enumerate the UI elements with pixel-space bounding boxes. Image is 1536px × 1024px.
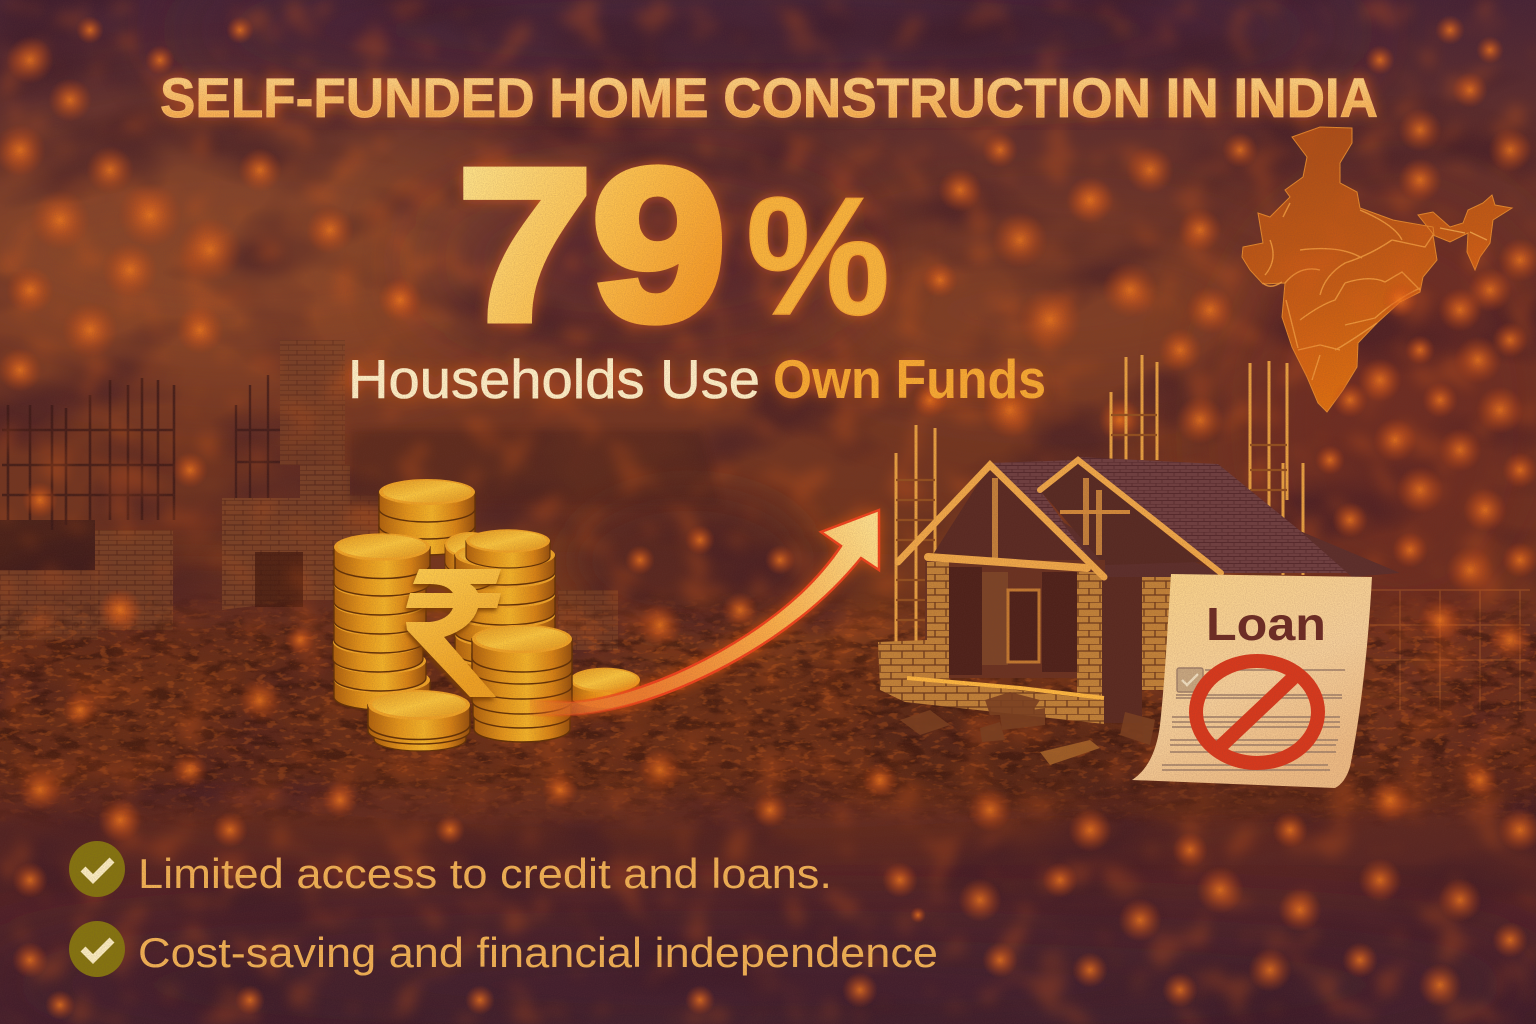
rubble (900, 692, 1155, 765)
rebar columns (896, 355, 1303, 645)
roof (1078, 457, 1352, 573)
icon: loan document with prohibition sign (1132, 574, 1372, 788)
bullet text: Cost-saving and financial independence (138, 929, 938, 976)
icon: check (69, 921, 125, 977)
bullet 2 (69, 921, 938, 977)
ground rubble (0, 627, 1536, 815)
arrow (530, 510, 879, 716)
icon: check (69, 841, 125, 897)
left stack (333, 533, 430, 710)
gable interiors (925, 465, 1096, 567)
left walls (0, 520, 95, 570)
subtitle (348, 348, 1046, 410)
background construction silhouettes (0, 340, 1536, 830)
checkbox form row (1162, 668, 1345, 770)
icon: map of India (1242, 127, 1512, 412)
distant town (350, 430, 720, 505)
front stack (472, 625, 572, 742)
flat coin (570, 668, 640, 708)
brick building (222, 465, 350, 610)
big statistic: 79 (458, 124, 726, 365)
right stack (445, 529, 555, 685)
big statistic: % (746, 162, 890, 350)
rupee symbol (406, 569, 501, 697)
low stack (368, 690, 470, 751)
brick pile (558, 590, 618, 650)
back stack (379, 479, 475, 555)
scaffolding mid (236, 375, 280, 500)
timber beams (898, 460, 1221, 577)
building tower (280, 340, 345, 465)
walls (925, 560, 1105, 678)
bullet text: Limited access to credit and loans. (138, 850, 832, 897)
icon: house under construction (878, 355, 1400, 765)
subtitle: Households Use (348, 348, 760, 410)
subtitle: Own Funds (773, 348, 1046, 410)
title: SELF-FUNDED HOME CONSTRUCTION IN INDIA (160, 66, 1378, 129)
icon: coin stacks (333, 479, 640, 751)
loan label: Loan (1206, 598, 1326, 650)
prohibition sign (1196, 661, 1318, 763)
scaffolding left (2, 378, 175, 530)
scaffold right (1370, 590, 1530, 710)
foundation (878, 640, 1104, 724)
bullet 1 (69, 841, 832, 897)
